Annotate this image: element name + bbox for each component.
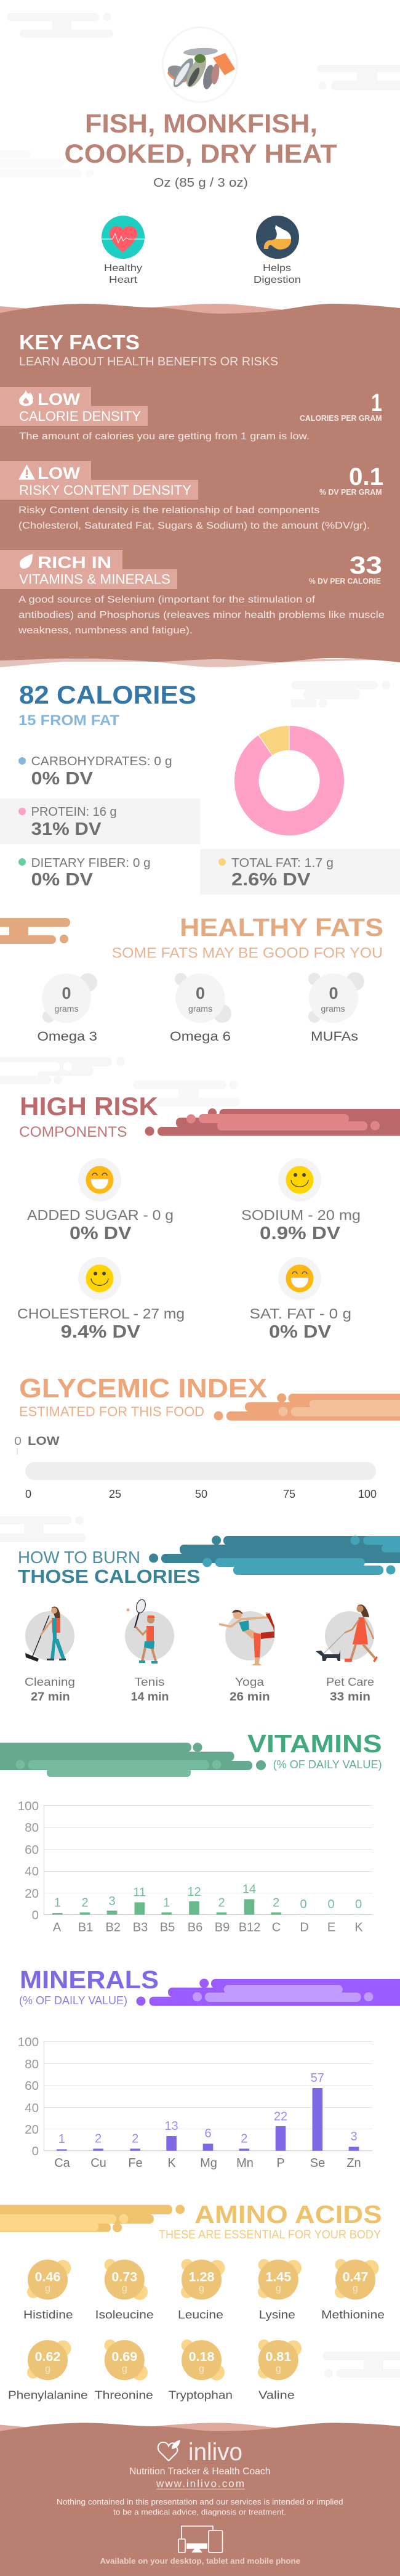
amino acid: threonine: Threonine (95, 2388, 153, 2402)
bar chart: minerals: 2 (95, 2132, 102, 2146)
gauge: glycemic index: 50 (195, 1488, 207, 1500)
bar chart: vitamins: 14 (242, 1883, 256, 1896)
heading: vitamins: VITAMINS (247, 1729, 382, 1758)
amino acid: tryptophan: 0.18 (189, 2349, 214, 2364)
nutrient: carbohydrates (18, 755, 172, 789)
stat: omega 3: Omega 3 (37, 1030, 97, 1044)
decorative cloud: header right (317, 65, 400, 90)
decorative bars: amino acids (0, 2204, 185, 2232)
risk: added sugar: 0% DV (70, 1224, 132, 1243)
amino acid: methionine: g (353, 2283, 358, 2294)
amino acid: lysine: Lysine (259, 2308, 295, 2321)
heading: amino acids: AMINO ACIDS (194, 2200, 382, 2229)
activity: tennis: 14 min (131, 1691, 169, 1704)
bar chart: vitamins: 11 (133, 1885, 146, 1899)
fact: vitamins and minerals (0, 550, 385, 636)
amino acid: phenylalanine: Phenylalanine (8, 2388, 88, 2402)
nutrient: total fat: 2.6% DV (231, 870, 311, 890)
decorative cloud: burn calories (0, 1516, 86, 1542)
amino acid: histidine (23, 2260, 73, 2321)
nutrient: carbohydrates: 0% DV (31, 769, 94, 789)
bar chart: minerals: K (167, 2156, 176, 2170)
bar chart: vitamins: K (354, 1921, 363, 1935)
activity: pet care: 33 min (330, 1691, 370, 1704)
decorative bars: glycemic index (214, 1394, 400, 1421)
heading: glycemic index: GLYCEMIC INDEX (19, 1373, 267, 1404)
stat: omega 6 (170, 973, 231, 1044)
bar chart: vitamins: B2 (105, 1921, 121, 1935)
heading: how to burn: HOW TO BURN (18, 1548, 140, 1567)
activity: pet care (316, 1604, 378, 1704)
amino acid: lysine: 1.45 (265, 2270, 291, 2285)
bar chart: vitamins: B1 (78, 1921, 93, 1935)
activity: yoga: 26 min (230, 1691, 270, 1704)
fact: risky content density: LOW (38, 464, 81, 482)
amino acid: threonine (95, 2339, 153, 2402)
bar chart: vitamins: 20 (25, 1887, 39, 1901)
icon: helps digestion (254, 216, 301, 285)
donut chart: macronutrients (234, 726, 345, 835)
bar chart: minerals: Se (310, 2156, 325, 2170)
bar chart: vitamins: B9 (215, 1921, 230, 1935)
bar chart: minerals (18, 2035, 372, 2170)
bar chart: vitamins: 12 (187, 1885, 201, 1899)
gauge: glycemic index (14, 1435, 377, 1500)
amino acid: valine: Valine (258, 2388, 295, 2402)
heading: key facts: KEY FACTS (19, 331, 140, 354)
activity: tennis (125, 1599, 174, 1704)
subheading: vitamins: (% OF DAILY VALUE) (273, 1758, 382, 1771)
amino acid: histidine: 0.46 (35, 2270, 60, 2285)
nutrient: protein (0, 798, 201, 844)
bar chart: minerals: 3 (350, 2130, 358, 2143)
fact: calorie density: The amount of calories you are getting from 1 gram is low. (19, 431, 310, 442)
amino acid: methionine: Methionine (321, 2308, 385, 2321)
bar chart: vitamins: B6 (188, 1921, 202, 1935)
panel: key facts (0, 304, 400, 667)
bar chart: vitamins: 1 (163, 1896, 170, 1910)
icon: helps digestion: Digestion (254, 275, 301, 285)
nutrient: dietary fiber: 0% DV (31, 870, 94, 890)
bar chart: vitamins: B12 (239, 1921, 260, 1935)
nutrient: protein: 31% DV (31, 819, 102, 839)
fact: calorie density: CALORIE DENSITY (19, 408, 141, 424)
bar chart: vitamins: E (327, 1921, 335, 1935)
bar chart: vitamins: 2 (273, 1896, 279, 1910)
bar chart: minerals: 80 (25, 2057, 39, 2071)
title (64, 109, 337, 169)
amino acid: tryptophan: g (199, 2363, 204, 2375)
nutrient: dietary fiber: DIETARY FIBER: 0 g (31, 856, 151, 870)
fact: risky content density: 0.1 (349, 463, 383, 490)
subheading: healthy fats: SOME FATS MAY BE GOOD FOR YOU (112, 945, 383, 962)
availability note: Available on your desktop, tablet and mobile phone (100, 2556, 300, 2566)
amino acid: leucine: 1.28 (189, 2270, 214, 2285)
amino acid: tryptophan: Tryptophan (169, 2388, 233, 2402)
amino acid: histidine: g (45, 2283, 50, 2294)
bar chart: minerals: 20 (25, 2123, 39, 2137)
amino acid: phenylalanine: 0.62 (35, 2349, 60, 2364)
disclaimer: to be a medical advice, diagnosis or treatment. (113, 2508, 286, 2517)
gauge: glycemic index: LOW (28, 1435, 60, 1448)
risk: added sugar (27, 1158, 174, 1243)
bar chart: vitamins: C (272, 1921, 281, 1935)
fact: risky content density: (Cholesterol, Saturated Fat, Sugars & Sodium) to the amount (%DV/gr). (18, 521, 370, 531)
logo: inlivo (158, 2439, 242, 2466)
nutrient: dietary fiber (18, 856, 151, 890)
heading: high risk: HIGH RISK (20, 1092, 158, 1121)
bar chart: minerals: Fe (128, 2156, 143, 2170)
risk: cholesterol: CHOLESTEROL - 27 mg (17, 1306, 185, 1322)
fact: vitamins and minerals: % DV PER CALORIE (309, 577, 381, 585)
bar chart: vitamins: 3 (108, 1895, 116, 1908)
fact: calorie density: LOW (38, 390, 81, 408)
amino acid: leucine: g (199, 2283, 204, 2294)
bar chart: minerals: 100 (18, 2035, 39, 2049)
bar chart: vitamins: B5 (160, 1921, 175, 1935)
subheading: components: COMPONENTS (19, 1124, 127, 1140)
serving size: Oz (85 g / 3 oz) (153, 176, 248, 190)
stat: omega 6: 0 (196, 984, 205, 1002)
icon: healthy heart: Heart (109, 275, 138, 285)
amino acid: leucine (178, 2259, 225, 2321)
bar chart: vitamins: 60 (25, 1843, 39, 1857)
bar chart: minerals: Mg (200, 2156, 217, 2170)
fact: vitamins and minerals: VITAMINS & MINERALS (19, 572, 170, 587)
decorative cloud: amino acids (322, 2352, 400, 2378)
amino acid: threonine: 0.69 (111, 2349, 137, 2364)
heading: those calories: THOSE CALORIES (18, 1566, 201, 1587)
risk: added sugar: ADDED SUGAR - 0 g (27, 1207, 174, 1223)
nutrient: total fat (201, 849, 400, 895)
amino acid: isoleucine (95, 2259, 154, 2321)
amino acid: lysine (258, 2259, 302, 2321)
bar chart: minerals: 13 (164, 2119, 178, 2133)
bar chart: vitamins (18, 1799, 372, 1935)
website: www.inlivo.com (156, 2478, 244, 2489)
bar chart: minerals: P (276, 2156, 285, 2170)
gauge: glycemic index: 75 (283, 1488, 295, 1500)
logo: inlivo: inlivo (188, 2439, 242, 2466)
activity: cleaning: 27 min (31, 1691, 70, 1704)
fact: vitamins and minerals: weakness, numbness and fatigue). (18, 625, 193, 636)
fact: vitamins and minerals: RICH IN (38, 553, 111, 572)
bar chart: minerals: 0 (32, 2144, 39, 2158)
amino acid: leucine: Leucine (178, 2308, 223, 2321)
fact: risky content density: % DV PER GRAM (319, 488, 382, 497)
heading: 82 calories: 82 CALORIES (19, 680, 196, 709)
bar chart: vitamins: 0 (300, 1898, 307, 1911)
bar chart: vitamins: 2 (218, 1896, 225, 1910)
gauge: glycemic index: 25 (109, 1488, 121, 1500)
subheading: minerals: (% OF DAILY VALUE) (19, 1994, 127, 2007)
food image: fish (162, 27, 238, 102)
bar chart: vitamins: 80 (25, 1821, 39, 1835)
subheading: amino acids: THESE ARE ESSENTIAL FOR YOUR BODY (159, 2229, 381, 2241)
decorative cloud: high risk center (133, 1081, 240, 1107)
stat: mufas: 0 (329, 984, 338, 1002)
decorative bars: healthy fats (0, 918, 70, 944)
activity: cleaning: Cleaning (25, 1676, 75, 1688)
stat: omega 6: Omega 6 (170, 1030, 231, 1044)
decorative bars: high risk (145, 1108, 400, 1136)
risk: sodium: SODIUM - 20 mg (241, 1207, 361, 1223)
risk: cholesterol (17, 1257, 185, 1342)
bar chart: minerals: 2 (132, 2132, 138, 2146)
bar chart: vitamins: 1 (54, 1896, 61, 1910)
icon: devices (178, 2526, 223, 2553)
risk: saturated fat: SAT. FAT - 0 g (250, 1306, 351, 1322)
gauge: glycemic index: 100 (358, 1488, 377, 1500)
fact: vitamins and minerals: A good source of Selenium (important for the stimulation of (18, 595, 316, 605)
risk: saturated fat (250, 1257, 351, 1342)
icon: helps digestion: Helps (263, 263, 291, 274)
decorative bars: vitamins (0, 1742, 266, 1777)
decorative cloud: header left (7, 12, 113, 38)
stat: omega 6: grams (188, 1004, 212, 1014)
amino acid: lysine: g (276, 2283, 281, 2294)
disclaimer: Nothing contained in this presentation and our services is intended or implied (57, 2497, 343, 2506)
amino acid: histidine: Histidine (23, 2308, 73, 2321)
amino acid: valine: 0.81 (265, 2349, 291, 2364)
bar chart: vitamins: 40 (25, 1864, 39, 1879)
decorative cloud: high risk left (0, 1057, 125, 1084)
amino acid: methionine (321, 2259, 385, 2321)
bar chart: vitamins: 2 (81, 1896, 89, 1910)
bar chart: vitamins: 0 (327, 1898, 335, 1911)
activity: cleaning (25, 1607, 75, 1704)
bar chart: vitamins: D (300, 1921, 309, 1935)
activity: pet care: Pet Care (326, 1676, 374, 1688)
nutrient: total fat: TOTAL FAT: 1.7 g (231, 856, 334, 870)
decorative cloud: title left (0, 150, 94, 177)
bar chart: minerals: Zn (346, 2156, 361, 2170)
activity: yoga: Yoga (235, 1676, 265, 1688)
decorative bars: minerals (137, 1979, 400, 2006)
decorative bars: burn calories (149, 1535, 400, 1575)
bar chart: vitamins: 0 (32, 1908, 39, 1922)
bar chart: minerals: Ca (54, 2156, 71, 2170)
bar chart: minerals: 2 (241, 2132, 247, 2146)
activity: tennis: Tenis (134, 1676, 165, 1688)
bar chart: minerals: 1 (58, 2132, 65, 2146)
fact: calorie density: 1 (371, 389, 382, 416)
bar chart: minerals: 60 (25, 2079, 39, 2093)
disclaimer (57, 2497, 343, 2517)
fact: risky content density: RISKY CONTENT DENSITY (19, 482, 191, 498)
title: FISH, MONKFISH, (85, 109, 318, 139)
amino acid: isoleucine: g (122, 2283, 127, 2294)
icon: healthy heart: Healthy (104, 263, 142, 274)
subheading: glycemic index: ESTIMATED FOR THIS FOOD (19, 1404, 204, 1420)
panel: footer (0, 2423, 400, 2576)
nutrient: carbohydrates: CARBOHYDRATES: 0 g (31, 755, 172, 768)
risk: sodium (241, 1158, 361, 1243)
title: COOKED, DRY HEAT (64, 139, 337, 169)
amino acid: isoleucine: Isoleucine (95, 2308, 154, 2321)
amino acid: threonine: g (122, 2363, 127, 2375)
bar chart: minerals: 40 (25, 2101, 39, 2115)
amino acid: valine (258, 2339, 302, 2402)
bar chart: minerals: 57 (311, 2071, 324, 2085)
risk: cholesterol: 9.4% DV (61, 1322, 141, 1342)
bar chart: minerals: 22 (274, 2110, 287, 2124)
fact: vitamins and minerals: 33 (350, 552, 382, 579)
fact: vitamins and minerals: antibodies) and Phosphorus (releaves minor health problems like muscle (18, 610, 385, 620)
bar chart: minerals: Mn (236, 2156, 254, 2170)
fact: calorie density (0, 387, 382, 442)
risk: saturated fat: 0% DV (269, 1322, 332, 1342)
tagline: Nutrition Tracker & Health Coach (129, 2466, 271, 2477)
subheading: from fat: 15 FROM FAT (18, 712, 119, 729)
fact: risky content density (0, 461, 383, 531)
bar chart: vitamins: B3 (133, 1921, 148, 1935)
amino acid: phenylalanine (8, 2340, 88, 2402)
stat: omega 3: grams (55, 1004, 78, 1014)
amino acid: methionine: 0.47 (343, 2270, 368, 2285)
decorative cloud: calories (291, 681, 390, 708)
bar chart: minerals: Cu (90, 2156, 106, 2170)
stat: mufas: MUFAs (311, 1030, 358, 1044)
subheading: LEARN ABOUT HEALTH BENEFITS OR RISKS (19, 356, 278, 368)
gauge: glycemic index: 0 (14, 1435, 22, 1447)
amino acid: phenylalanine: g (45, 2363, 50, 2375)
heading: minerals: MINERALS (20, 1965, 159, 1994)
stat: mufas (308, 972, 364, 1044)
icon: healthy heart (102, 216, 145, 285)
fact: calorie density: CALORIES PER GRAM (300, 414, 382, 423)
heading: healthy fats: HEALTHY FATS (180, 913, 383, 941)
bar chart: vitamins: A (53, 1921, 62, 1935)
bar chart: minerals: 6 (204, 2127, 212, 2140)
gauge: glycemic index: 0 (25, 1488, 31, 1500)
stat: omega 3 (37, 973, 97, 1044)
bar chart: vitamins: 100 (18, 1799, 39, 1813)
amino acid: isoleucine: 0.73 (111, 2270, 137, 2285)
bar chart: vitamins: 0 (355, 1898, 362, 1911)
fact: risky content density: Risky Content density is the relationship of bad components (18, 505, 320, 516)
activity: yoga (219, 1610, 274, 1704)
stat: mufas: grams (321, 1004, 345, 1014)
stat: omega 3: 0 (62, 984, 71, 1002)
amino acid: valine: g (276, 2363, 281, 2375)
risk: sodium: 0.9% DV (260, 1224, 341, 1243)
nutrient: protein: PROTEIN: 16 g (31, 805, 117, 819)
amino acid: tryptophan (169, 2339, 233, 2402)
